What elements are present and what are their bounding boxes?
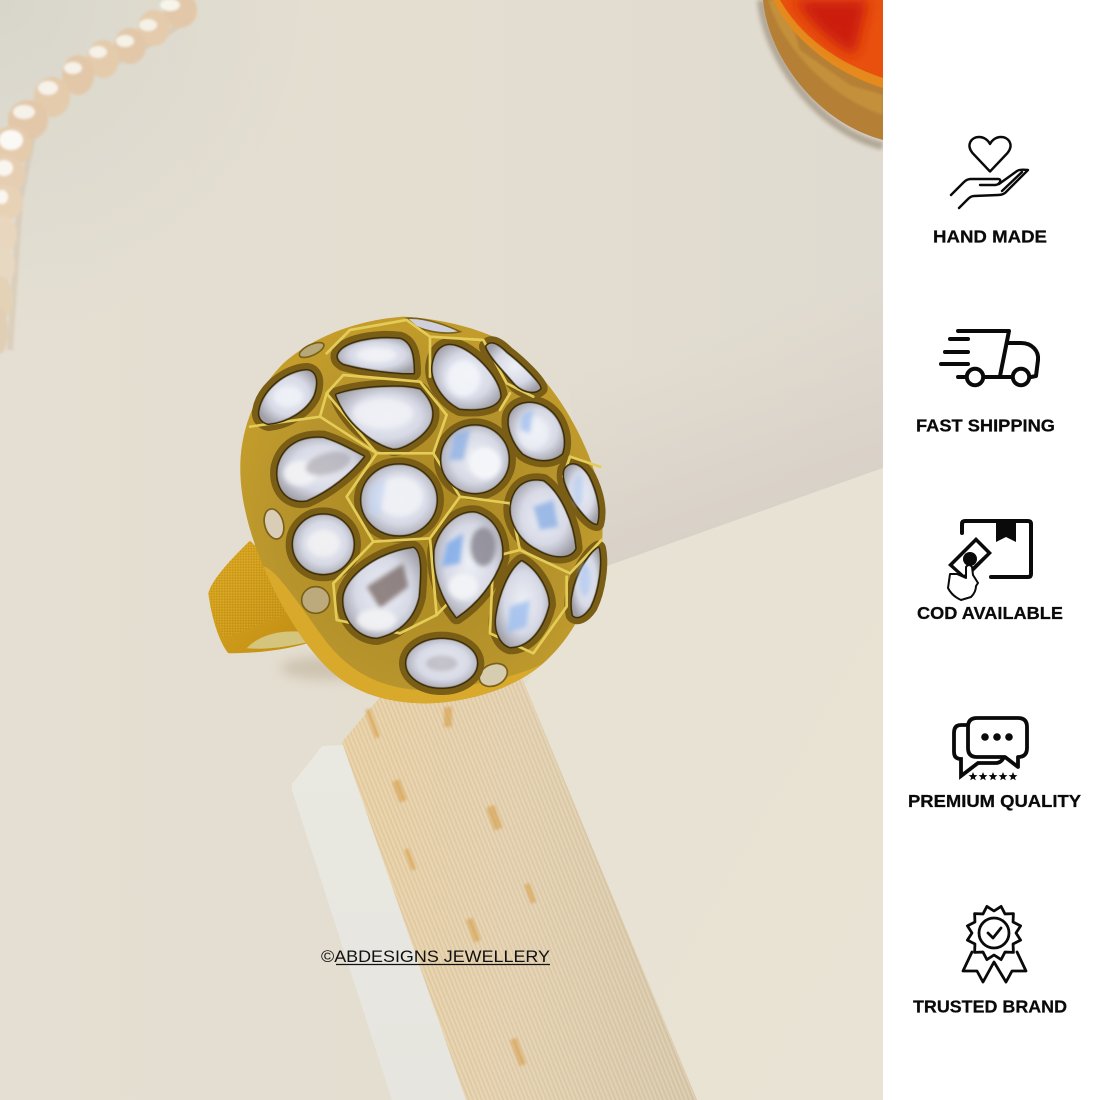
copyright watermark: ©ABDESIGNS JEWELLERY [321,947,550,966]
ring [208,317,603,703]
ring head, stones and setting [240,317,603,703]
pearl shadow [10,14,195,350]
page-edge block [342,678,697,1100]
paper sheet [525,468,883,1100]
polished web lines [250,320,602,653]
polished lower rim [263,567,543,703]
pearl necklace [0,0,197,354]
small side stones [261,318,511,691]
icon: rosette badge [963,906,1026,982]
icon: chat bubbles with stars [954,718,1027,780]
icon: delivery truck [941,331,1038,385]
kundan stones [260,339,600,687]
ring band [208,541,317,653]
orange bowl [761,0,883,146]
ring head metal [240,317,603,703]
feature: trusted brand [913,906,1067,1016]
label: cod available: COD AVAILABLE [917,603,1063,623]
feature: cash on delivery [917,520,1063,623]
ring shadow [280,656,380,680]
label: trusted brand: TRUSTED BRAND [913,996,1067,1016]
bright setting frames [260,339,600,687]
dark bezels [260,339,600,687]
feature: hand made [933,137,1047,246]
white features panel [883,0,1100,1100]
white bookmark strip [292,745,466,1100]
label: premium quality: PREMIUM QUALITY [908,791,1081,811]
stone highlights [273,348,591,671]
icon: heart in hand [951,137,1028,208]
label: fast shipping: FAST SHIPPING [916,416,1055,436]
icon: box and cash in hand [948,520,1031,600]
feature: premium quality [908,718,1081,811]
label: hand made: HAND MADE [933,226,1047,246]
feature: fast shipping [916,331,1055,436]
